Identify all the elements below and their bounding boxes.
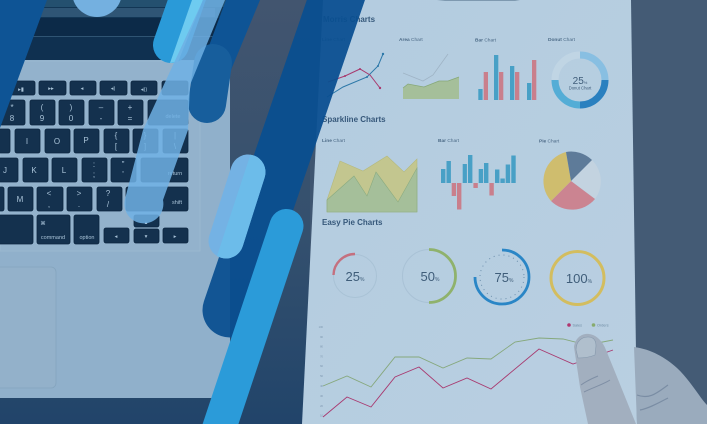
home key row: J <box>3 166 7 175</box>
large line chart <box>319 323 613 418</box>
number key row: - <box>100 114 103 123</box>
gauge 100 percent: 100% <box>566 271 593 286</box>
dark band upper <box>200 0 260 70</box>
hand <box>574 334 707 424</box>
home key row: ; <box>93 170 95 179</box>
function key row: ▸▸ <box>48 86 54 92</box>
function key row: ◂) <box>111 86 115 92</box>
morris area chart: Area Chart <box>399 37 423 43</box>
morris donut chart: 25% <box>573 76 588 87</box>
chart axis labels <box>319 325 324 418</box>
thumb crease <box>581 376 610 392</box>
dark pill upper <box>207 63 213 104</box>
palm crease <box>637 385 668 410</box>
translucent pill <box>124 0 225 223</box>
number key row: – <box>99 103 104 112</box>
cyan pill highlight <box>170 0 203 63</box>
cyan band <box>215 226 286 424</box>
cyan pill <box>171 0 191 45</box>
heading: Sparkline Charts: Sparkline Charts <box>322 115 386 124</box>
gauge 25 percent: 25% <box>346 269 365 284</box>
number key row: 8 <box>10 114 15 123</box>
qwerty key row: ] <box>144 142 146 151</box>
keyboard <box>0 81 188 244</box>
qwerty key row: [ <box>115 142 118 151</box>
function key row: ◂)) <box>141 87 147 93</box>
number key row: + <box>128 103 133 112</box>
morris bar chart <box>475 38 536 100</box>
sparkline pie chart <box>539 138 601 210</box>
lower key row: ? <box>106 189 111 198</box>
legend <box>567 323 609 328</box>
morris line chart <box>322 37 384 97</box>
light pill <box>208 154 266 258</box>
home key row: K <box>31 166 37 175</box>
chart axis labels: 60 <box>320 364 324 368</box>
paper sheet <box>302 0 637 424</box>
qwerty key row: I <box>26 137 28 146</box>
qwerty key row: | <box>174 131 176 140</box>
qwerty key row: { <box>115 131 118 140</box>
qwerty key row: \ <box>174 142 177 151</box>
gauge 100 percent <box>551 252 604 304</box>
lower key row: shift <box>172 200 183 206</box>
chart axis labels: 30 <box>320 394 324 398</box>
top-left dark triangle <box>0 0 47 128</box>
morris donut chart: Donut Chart <box>548 37 576 43</box>
laptop hinge and top keys <box>0 0 240 62</box>
paper top smudge <box>437 0 520 1</box>
heading: Easy Pie Charts: Easy Pie Charts <box>322 218 383 227</box>
number key row: 9 <box>40 114 45 123</box>
lower key row: , <box>48 200 50 209</box>
number key row: ( <box>41 103 44 112</box>
home key row <box>0 158 188 182</box>
lower key row <box>0 187 188 211</box>
bottom key row: ▸ <box>174 234 177 240</box>
morris area chart <box>399 37 459 99</box>
bottom key row <box>0 215 188 244</box>
legend: Sales <box>572 324 582 328</box>
lower key row: < <box>47 189 52 198</box>
thumb <box>574 334 636 424</box>
bottom key row: command <box>41 235 65 241</box>
palm <box>634 347 707 424</box>
top circle <box>72 0 122 17</box>
number key row: = <box>128 114 133 123</box>
lower key row: / <box>107 200 110 209</box>
morris donut chart <box>548 37 605 105</box>
number key row: * <box>10 103 14 112</box>
decorative blue shapes <box>0 0 340 424</box>
morris bar chart: Bar Chart <box>475 38 497 44</box>
number key row: delete <box>166 114 180 120</box>
gauge 25 percent <box>334 254 376 298</box>
qwerty key row: } <box>144 131 147 140</box>
number key row: ) <box>70 103 73 112</box>
bottom key row: ▾ <box>145 234 148 240</box>
lower key row: . <box>78 200 80 209</box>
gauge 50 percent <box>402 250 456 302</box>
sales line <box>323 349 613 417</box>
number key row <box>0 100 188 125</box>
gauge 75 percent <box>475 250 529 304</box>
chart axis labels: 80 <box>320 344 324 348</box>
morris donut chart: Donut Chart <box>569 86 592 90</box>
qwerty key row <box>0 129 188 153</box>
function key row: ◂ <box>81 86 84 92</box>
chart axis labels: 20 <box>320 404 324 408</box>
laptop <box>0 0 240 398</box>
bottom key row: ◂ <box>115 234 118 240</box>
dark large band <box>230 0 340 310</box>
gauge 50 percent: 50% <box>421 269 440 284</box>
qwerty key row: O <box>54 137 60 146</box>
sparkline bar chart <box>438 138 516 210</box>
lower key row: > <box>77 189 82 198</box>
laptop body <box>0 60 230 398</box>
trackpad <box>0 267 56 388</box>
chart axis labels: 10 <box>320 414 324 418</box>
sparkline area chart <box>322 138 417 212</box>
chart axis labels: 50 <box>320 374 324 378</box>
sparkline area chart: Line Chart <box>322 138 346 144</box>
number key row: 0 <box>69 114 74 123</box>
paper report <box>302 0 637 424</box>
bottom key row: ⌘ <box>40 220 46 227</box>
orders line <box>323 338 613 387</box>
chart axis labels: 40 <box>320 384 324 388</box>
bottom key row: ▴ <box>145 220 148 226</box>
home key row: L <box>62 166 67 175</box>
function key row <box>0 81 188 95</box>
heading: Morris Charts: Morris Charts <box>323 15 376 24</box>
home key row: return <box>168 171 182 177</box>
home key row: " <box>122 160 125 169</box>
chart axis labels: 70 <box>320 354 324 358</box>
legend: Orders <box>597 324 609 328</box>
chart axis labels: 90 <box>320 335 324 339</box>
morris line chart: Line Chart <box>322 37 346 43</box>
chart axis labels: 100 <box>319 325 324 329</box>
sparkline pie chart: Pie Chart <box>539 138 560 144</box>
home key row: ' <box>122 170 124 179</box>
qwerty key row: P <box>83 136 89 145</box>
sparkline bar chart: Bar Chart <box>438 138 460 144</box>
lower key row: M <box>17 195 24 204</box>
thumbnail <box>576 337 596 358</box>
home key row: : <box>93 160 95 169</box>
bottom key row: option <box>80 235 94 241</box>
function key row: ▸▮ <box>18 87 24 93</box>
gauge 75 percent: 75% <box>495 270 514 285</box>
